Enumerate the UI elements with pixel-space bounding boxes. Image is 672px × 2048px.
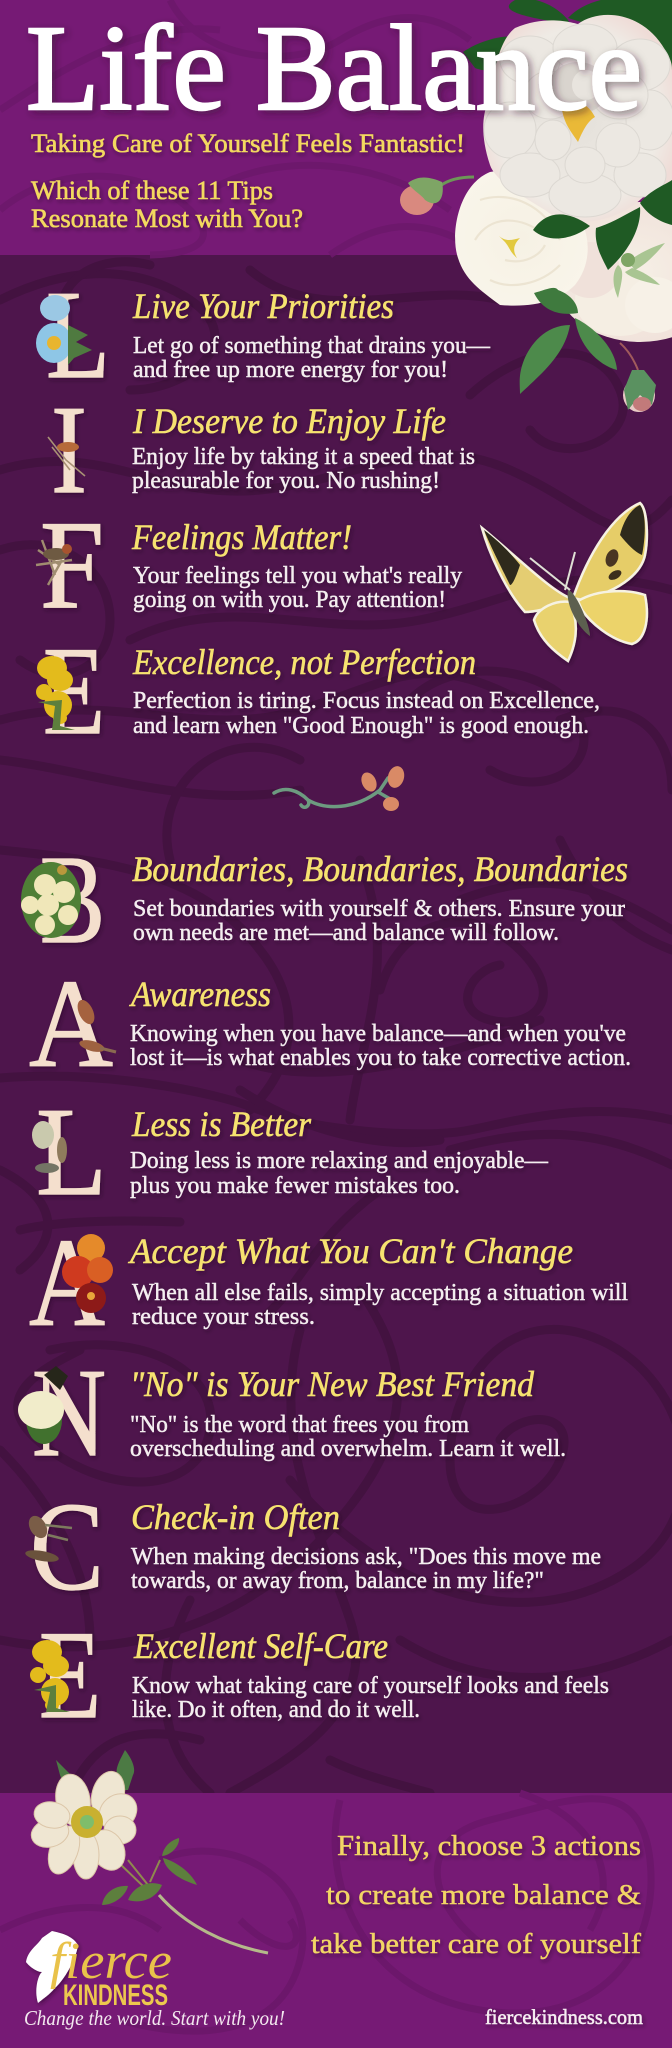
flower centre	[71, 1806, 103, 1838]
description: lost it—is what enables you to take corrective action.	[130, 1045, 631, 1071]
tip: Excellent Self-Care	[30, 1606, 609, 1745]
background swirl pattern: header	[0, 0, 470, 255]
letter A with red flowers: A	[29, 1214, 105, 1353]
butterfly dark wing tips	[620, 505, 645, 555]
callout: closing message: Finally, choose 3 actions	[337, 1831, 641, 1862]
callout: closing message: take better care of yourself	[311, 1929, 642, 1960]
description: Perfection is tiring. Focus instead on Excellence,	[133, 688, 600, 714]
description: and free up more energy for you!	[133, 357, 448, 383]
description: overscheduling and overwhelm. Learn it well.	[130, 1436, 566, 1462]
heading: "No" is Your New Best Friend	[130, 1364, 535, 1404]
background swirl pattern: body	[0, 262, 672, 1793]
tip: Live Your Priorities	[36, 266, 491, 405]
letter N with white flowers: N	[32, 1344, 106, 1483]
icon: floral sprig divider	[274, 764, 407, 811]
illustration: white roses cluster	[400, 0, 672, 412]
tip: Less is Better	[32, 1083, 549, 1222]
heading: Feelings Matter!	[131, 517, 352, 557]
tip: Feelings Matter!	[36, 496, 462, 635]
description: like. Do it often, and do it well.	[132, 1697, 420, 1723]
dark leaves between roses	[533, 180, 672, 270]
tip: No	[18, 1344, 566, 1483]
description	[133, 896, 625, 946]
heading: I Deserve to Enjoy Life	[132, 401, 446, 441]
tip: Awareness	[29, 955, 631, 1094]
heading: Accept What You Can't Change	[128, 1231, 573, 1271]
illustration: wild rose with stem	[28, 1750, 268, 1953]
petals	[28, 1768, 144, 1879]
question text: Resonate Most with You?	[31, 204, 303, 233]
heading: Check-in Often	[131, 1497, 340, 1537]
panel: header background	[0, 0, 672, 255]
rose: cream middle	[455, 171, 588, 306]
description: going on with you. Pay attention!	[133, 587, 446, 613]
description: Your feelings tell you what's really	[133, 563, 462, 589]
letter L with birds and leaves: L	[36, 1083, 107, 1222]
tip: Check-in Often	[24, 1478, 601, 1617]
callout: closing message: to create more balance &	[326, 1880, 641, 1911]
letter E with yellow flowers: E	[43, 622, 105, 761]
letter B with white flowers	[21, 831, 105, 970]
letter I with bird: I	[51, 381, 87, 520]
tip: Boundaries	[21, 831, 628, 970]
description: "No" is the word that frees you from	[130, 1412, 469, 1438]
icon: yellow butterfly	[482, 503, 647, 661]
description	[133, 563, 462, 613]
description: Knowing when you have balance—and when you've	[130, 1021, 626, 1047]
description	[133, 333, 491, 383]
leaves	[102, 1838, 197, 1905]
description: Enjoy life by taking it a speed that is	[132, 444, 475, 470]
description: When all else fails, simply accepting a situation will	[132, 1280, 628, 1306]
question text: Which of these 11 Tips	[31, 176, 273, 205]
icon: lion head	[26, 1931, 78, 2003]
sepals star	[614, 243, 665, 298]
heading: Live Your Priorities	[132, 286, 394, 326]
description: When making decisions ask, "Does this move me	[131, 1544, 601, 1570]
description: Know what taking care of yourself looks and feels	[132, 1673, 609, 1699]
heading: Awareness	[129, 974, 271, 1014]
leaves behind top rose	[463, 0, 672, 75]
heading: Boundaries, Boundaries, Boundaries	[132, 849, 628, 889]
letter A with birds: A	[29, 955, 113, 1094]
tip: Excellence, not Perfection	[36, 622, 600, 761]
panel: body background	[0, 255, 672, 1793]
website url: fiercekindness.com	[485, 2005, 643, 2029]
description: pleasurable for you. No rushing!	[132, 468, 440, 494]
description	[130, 1021, 631, 1071]
buds	[56, 1750, 134, 1790]
description: reduce your stress.	[132, 1304, 315, 1330]
description: Let go of something that drains you—	[133, 333, 491, 359]
bottom bud	[620, 343, 656, 412]
title: Life Balance	[26, 1, 642, 136]
tagline: Change the world. Start with you!	[24, 2006, 285, 2030]
rose: pink-white top	[483, 15, 672, 222]
logo word: fierce: fierce	[50, 1933, 172, 1990]
letter E with yellow flowers: E	[39, 1606, 101, 1745]
rose: blush lower right	[552, 202, 672, 342]
stamens	[562, 103, 595, 142]
left bud	[400, 177, 474, 215]
description	[132, 1673, 609, 1723]
description	[132, 1280, 628, 1330]
description	[130, 1412, 566, 1462]
description	[131, 1544, 601, 1594]
description: Doing less is more relaxing and enjoyable—	[130, 1148, 549, 1174]
description	[130, 1148, 549, 1199]
question text	[31, 176, 303, 233]
logo word: KINDNESS: KINDNESS	[63, 1979, 168, 2012]
background swirl pattern: footer	[0, 1793, 651, 2031]
subtitle: Taking Care of Yourself Feels Fantastic!	[31, 129, 465, 158]
description: plus you make fewer mistakes too.	[130, 1173, 460, 1199]
callout: closing message	[311, 1831, 642, 1960]
description	[132, 444, 475, 494]
logo: Fierce Kindness	[24, 1931, 285, 2030]
heading: Less is Better	[131, 1104, 312, 1144]
tip: I Deserve to Enjoy Life	[48, 381, 475, 520]
lower leaves	[520, 288, 617, 394]
tip: Accept What You Can't Change	[29, 1214, 628, 1353]
description: and learn when "Good Enough" is good enough.	[133, 713, 589, 739]
description: Set boundaries with yourself & others. Ensure your	[133, 896, 625, 922]
description: own needs are met—and balance will follow.	[133, 920, 559, 946]
letter F with bird: F	[40, 496, 104, 635]
letter C with birds: C	[30, 1478, 104, 1617]
letter B with white flowers: B	[40, 831, 105, 970]
panel: footer background	[0, 1793, 672, 2048]
letter L with blue flowers: L	[46, 266, 110, 405]
heading: Excellence, not Perfection	[132, 642, 476, 682]
description	[133, 688, 600, 739]
heading: Excellent Self-Care	[133, 1626, 388, 1666]
description: towards, or away from, balance in my life?"	[131, 1568, 544, 1594]
